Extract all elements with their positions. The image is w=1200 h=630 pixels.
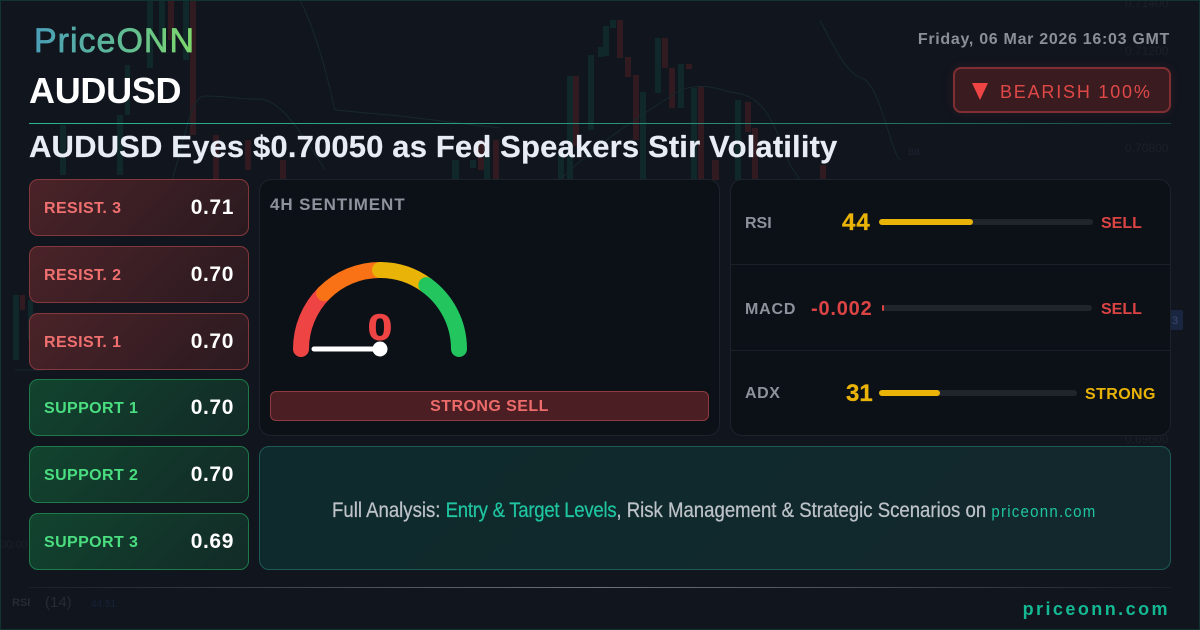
background: faint candlestick chart: 0.71000 [1125, 93, 1169, 107]
ADX row: 31 [846, 380, 873, 407]
headline: AUDUSD Eyes $0.70050 as Fed Speakers Stir Volatility [29, 129, 837, 164]
RSI row: RSI [745, 215, 772, 232]
levels column [29, 179, 249, 570]
MACD row: -0.002 [811, 298, 873, 320]
background: faint candlestick chart: 44.51 [91, 599, 116, 610]
panel: indicators [730, 179, 1171, 436]
RSI row: SELL [1101, 215, 1142, 232]
MACD row: SELL [1101, 301, 1142, 318]
support 3: 0.69 [191, 530, 234, 553]
resistance 3: RESIST. 3 [44, 200, 121, 217]
ADX row: ADX [745, 385, 781, 402]
resistance 2: RESIST. 2 [44, 267, 121, 284]
support 2 [29, 446, 249, 503]
ADX row: STRONG [1085, 386, 1156, 403]
support 2: 0.70 [191, 463, 234, 486]
background: faint candlestick chart: 0.69600 [1125, 432, 1169, 446]
resistance 1: RESIST. 1 [44, 334, 121, 351]
call to action panel [259, 446, 1171, 570]
gauge: 0 [368, 307, 392, 348]
support 1: SUPPORT 1 [44, 400, 138, 417]
MACD row: MACD [745, 301, 796, 318]
bearish badge [953, 67, 1171, 113]
ticker heading: AUDUSD [29, 70, 181, 111]
strong sell bar: STRONG SELL [430, 398, 549, 415]
resistance 3 [29, 179, 249, 236]
background: faint candlestick chart: 00:00 [0, 539, 28, 551]
background: faint candlestick chart: (14) [45, 594, 72, 611]
support 2: SUPPORT 2 [44, 467, 138, 484]
icon: down triangle [972, 83, 988, 100]
header rule [29, 123, 1171, 124]
ADX row [745, 380, 1156, 407]
date: Friday, 06 Mar 2026 16:03 GMT [918, 31, 1170, 48]
resistance 2 [29, 246, 249, 303]
background: faint candlestick chart: 0.70800 [1125, 141, 1169, 155]
footer rule [29, 587, 1171, 588]
background: faint candlestick chart: BB [908, 147, 920, 157]
footer url: priceonn.com [1023, 599, 1170, 619]
panel: 4H sentiment [259, 179, 720, 436]
support 1: 0.70 [191, 396, 234, 419]
strong sell bar [270, 391, 709, 421]
resistance 2: 0.70 [191, 263, 234, 286]
support 1 [29, 379, 249, 436]
logo: PriceONN [34, 22, 195, 60]
call to action text: Full Analysis: Entry & Target Levels, Risk Management & Strategic Scenarios on priceonn.com [332, 499, 1097, 522]
background: faint candlestick chart: RSI [12, 597, 30, 609]
badge label: BEARISH 100% [1000, 82, 1152, 102]
resistance 3: 0.71 [191, 196, 234, 219]
background: faint candlestick chart: 0.71200 [1125, 44, 1169, 58]
support 3: SUPPORT 3 [44, 534, 138, 551]
background: faint candlestick chart: 3 [1172, 315, 1178, 327]
sentiment heading: 4H SENTIMENT [270, 195, 405, 214]
resistance 1 [29, 313, 249, 370]
gauge [293, 262, 467, 357]
resistance 1: 0.70 [191, 330, 234, 353]
RSI row: 44 [842, 209, 871, 236]
MACD row [745, 298, 1142, 320]
RSI row [745, 209, 1142, 236]
support 3 [29, 513, 249, 570]
